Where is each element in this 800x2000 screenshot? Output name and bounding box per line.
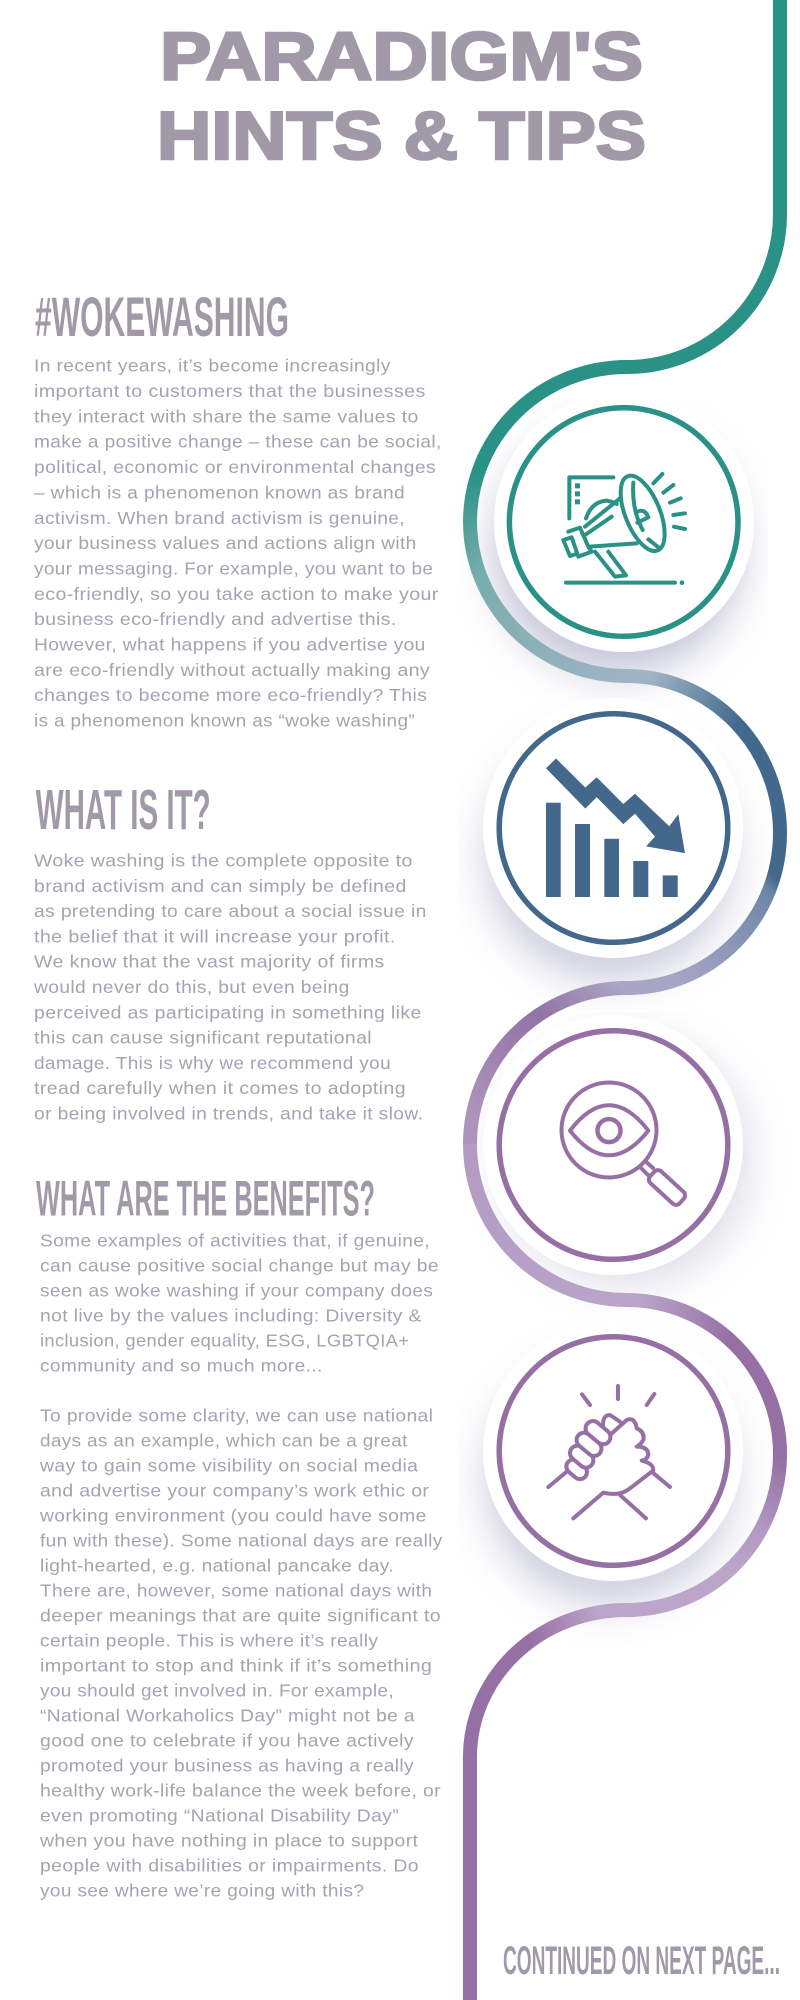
title [157,18,646,174]
circle 3: eye magnifier [483,1015,743,1275]
text block: national days: light-hearted, e.g. national pancake day. [40,1556,394,1576]
text block: national days: fun with these). Some national days are really [40,1531,443,1551]
text block: intro: important to customers that the businesses [34,381,426,401]
text block: intro: are eco-friendly without actually making any [34,660,430,680]
title: HINTS & TIPS [157,98,646,174]
text block: intro: they interact with share the same values to [34,406,419,426]
text block: national days: even promoting “National Disability Day” [40,1806,399,1826]
icon: falling arrow [546,758,685,853]
text block: intro: your business values and actions align with [34,533,417,553]
title: PARADIGM'S [160,18,643,94]
text block: intro: changes to become more eco-friendly? This [34,685,427,705]
text block: national days: days as an example, which can be a great [40,1431,408,1451]
text block: intro: However, what happens if you advertise you [34,634,426,654]
text block: benefits examples: Some examples of activities that, if genuine, [40,1231,430,1251]
text block: what is it [33,851,427,1123]
text block: national days: important to stop and think if it’s something [40,1656,432,1676]
text block: national days: people with disabilities or impairments. Do [40,1856,419,1876]
text block: national days: deeper meanings that are quite significant to [40,1606,441,1626]
circle 4: handshake [483,1321,743,1581]
text block: what is it: tread carefully when it comes to adopting [34,1078,406,1098]
text block: intro: eco-friendly, so you take action to make your [34,584,439,604]
heading: what is it: WHAT IS IT? [36,778,211,842]
text block: benefits examples: not live by the values including: Diversity & [40,1306,422,1326]
text block: national days: certain people. This is where it’s really [40,1631,378,1651]
text block: what is it: or being involved in trends, and take it slow. [34,1103,423,1123]
text block: intro [34,356,442,731]
text block: benefits examples [40,1231,439,1376]
text block: what is it: Woke washing is the complete opposite to [34,851,413,871]
circle 1: megaphone [494,392,754,652]
text block: national days: working environment (you could have some [39,1506,427,1526]
heading: #wokewashing: #WOKEWASHING [35,285,289,348]
text block: intro: – which is a phenomenon known as brand [34,482,405,502]
text block: benefits examples: seen as woke washing if your company does [40,1281,433,1301]
text block: national days: To provide some clarity, we can use national [40,1406,433,1426]
text block: national days [39,1406,443,1901]
text block: intro: In recent years, it’s become increasingly [34,356,391,376]
text block: national days: way to gain some visibility on social media [39,1456,418,1476]
text block: benefits examples: community and so much more... [40,1356,323,1376]
text block: national days: and advertise your company’s work ethic or [40,1481,429,1501]
icon: clasped hands [548,1386,670,1518]
text block: national days: healthy work-life balance the week before, or [40,1781,441,1801]
text block: benefits examples: inclusion, gender equality, ESG, LGBTQIA+ [40,1331,409,1351]
circle 2: falling bar chart [483,698,743,958]
text block: national days: “National Workaholics Day” might not be a [40,1706,415,1726]
text block: intro: your messaging. For example, you want to be [34,558,433,578]
text block: national days: you should get involved in. For example, [40,1681,394,1701]
text block: national days: you see where we’re going with this? [40,1881,364,1901]
text block: national days: good one to celebrate if you have actively [40,1731,414,1751]
text block: what is it: damage. This is why we recommend you [34,1053,391,1073]
text block: what is it: as pretending to care about a social issue in [34,901,427,921]
text block: intro: political, economic or environmental changes [34,457,436,477]
icon: megaphone [563,470,685,585]
text block: intro: is a phenomenon known as “woke washing” [34,711,415,731]
icon: bars [546,803,678,897]
text block: what is it: this can cause significant reputational [34,1028,372,1048]
heading: what are the benefits: WHAT ARE THE BENEFITS? [36,1171,375,1227]
text block: intro: business eco-friendly and advertise this. [34,609,397,629]
text block: what is it: would never do this, but even being [33,977,350,997]
text block: benefits examples: can cause positive social change but may be [40,1256,439,1276]
soft shadows behind circles [485,425,750,1605]
text block: national days: There are, however, some national days with [40,1581,432,1601]
text block: national days: promoted your business as having a really [40,1756,414,1776]
text block: national days: when you have nothing in place to support [39,1831,418,1851]
icon: magnifier with eye [562,1082,687,1207]
text block: intro: make a positive change – these can be social, [34,432,442,452]
text block: what is it: We know that the vast majority of firms [34,952,385,972]
winding path line [470,0,780,2000]
text block: what is it: brand activism and can simply be defined [34,876,407,896]
text block: what is it: the belief that it will increase your profit. [34,926,396,946]
text block: intro: activism. When brand activism is genuine, [34,508,405,528]
text block: what is it: perceived as participating in something like [34,1002,422,1022]
